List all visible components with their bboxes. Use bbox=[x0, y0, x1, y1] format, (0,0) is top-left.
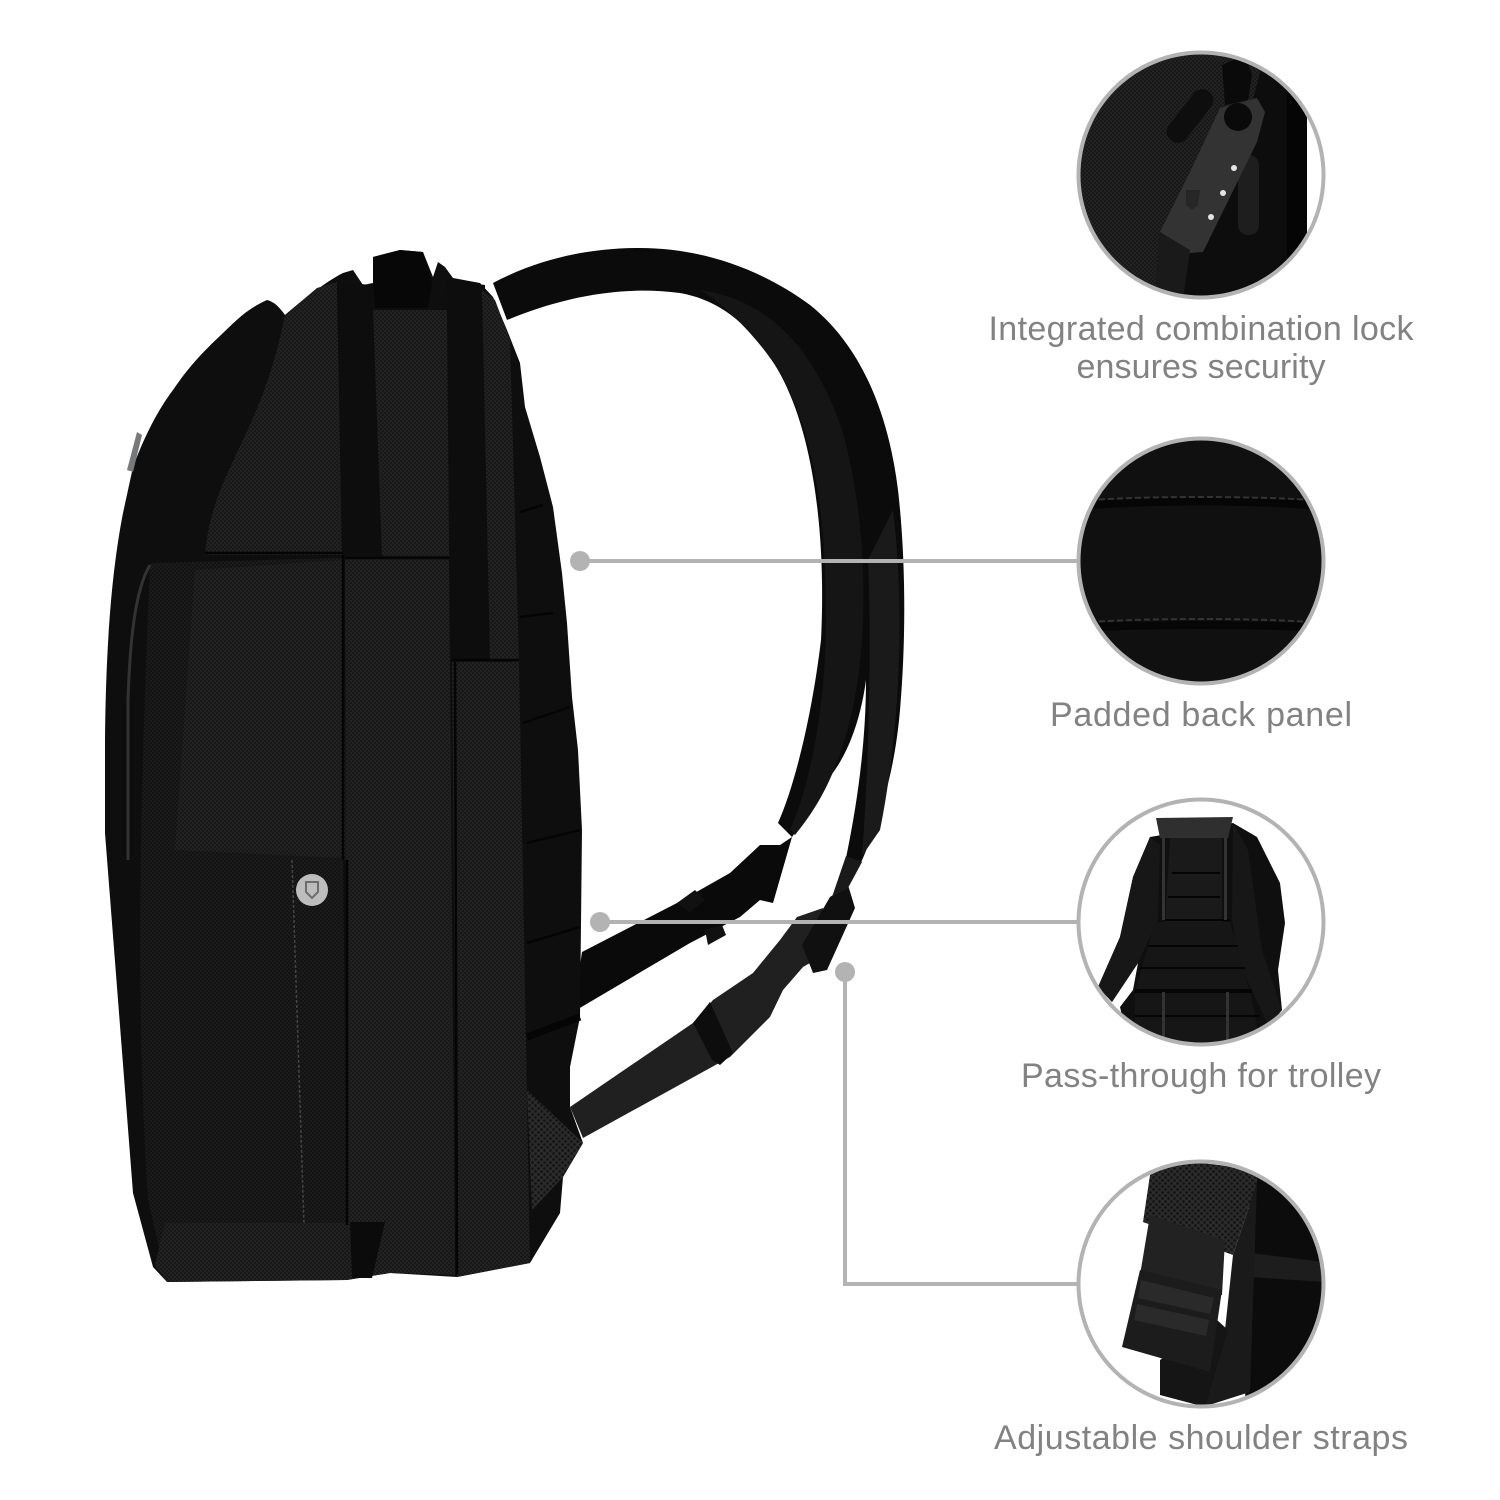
side tab bbox=[127, 432, 142, 472]
pocket edge stitching bbox=[292, 860, 304, 1225]
backpack side view bbox=[105, 248, 904, 1282]
buckle bbox=[1122, 1270, 1222, 1358]
logo stud bbox=[296, 874, 328, 906]
lower side sheen bbox=[175, 560, 345, 858]
caption: combination lock: ensures security bbox=[1076, 348, 1326, 386]
back seams bbox=[1135, 873, 1260, 1016]
right shoulder strap bbox=[1232, 823, 1282, 1025]
top handle bbox=[373, 250, 432, 308]
lower strap behind buckle bbox=[1160, 1320, 1228, 1407]
bottom band bbox=[155, 1223, 347, 1282]
lower back panel bbox=[1135, 922, 1262, 1050]
buckle strap link bbox=[832, 856, 862, 897]
body seams bbox=[205, 505, 580, 1275]
lock shield logo bbox=[1186, 190, 1200, 210]
zip pull right bbox=[1238, 155, 1259, 235]
right zip strip bbox=[447, 280, 490, 660]
caption: combination lock: Integrated combination lock bbox=[988, 310, 1414, 348]
right strap edge bbox=[1203, 1182, 1257, 1407]
caption: shoulder straps: Adjustable shoulder straps bbox=[994, 1419, 1408, 1457]
padded strap end bbox=[1143, 1160, 1257, 1255]
trolley rods bbox=[1162, 838, 1229, 1042]
caption: padded back panel: Padded back panel bbox=[1050, 696, 1352, 734]
back padding and body silhouette bbox=[105, 250, 583, 1282]
shoulder straps bbox=[493, 248, 904, 865]
left shoulder strap bbox=[1098, 837, 1150, 1002]
centre lower fabric panel bbox=[345, 558, 455, 1280]
webbing slider bbox=[693, 1002, 733, 1065]
detail circle: padded back panel bbox=[1078, 438, 1324, 684]
detail circle: trolley pass-through bbox=[1078, 799, 1324, 1050]
zipper top bbox=[1222, 55, 1252, 105]
lock body bbox=[1160, 98, 1265, 253]
caption: trolley pass-through: Pass-through for trolley bbox=[1021, 1057, 1381, 1095]
laptop zip curve bbox=[128, 565, 150, 860]
buckle webbing slots bbox=[1134, 1280, 1214, 1336]
lock shackle hole bbox=[1224, 103, 1252, 131]
backpack dark side bbox=[1245, 1177, 1322, 1396]
trolley handle bbox=[1156, 817, 1233, 838]
webbing bbox=[1140, 1215, 1225, 1295]
trolley opening panel bbox=[1165, 838, 1222, 922]
top zip strip bbox=[337, 282, 382, 555]
lower side fabric panel bbox=[140, 558, 347, 1282]
right lower fabric panel bbox=[452, 662, 530, 1277]
upper webbing strap bbox=[573, 837, 792, 1012]
stitched band bbox=[1254, 1254, 1322, 1282]
backpack rear body bbox=[1098, 823, 1285, 1050]
detail circle: combination lock bbox=[1078, 52, 1327, 300]
zip pull left bbox=[1166, 89, 1214, 143]
side pocket bbox=[163, 852, 347, 1223]
bottom zip bbox=[350, 1222, 385, 1278]
right top fabric panel bbox=[482, 290, 519, 662]
top centre fabric panel bbox=[373, 310, 449, 556]
callout line: padded back panel bbox=[570, 551, 1080, 571]
lock dials bbox=[1208, 165, 1237, 220]
lower webbing strap bbox=[570, 908, 823, 1138]
upper webbing tabs bbox=[677, 890, 726, 945]
webbing under lock bbox=[1156, 232, 1190, 294]
detail circle: shoulder straps bbox=[1078, 1160, 1324, 1407]
callout line: trolley pass-through bbox=[590, 912, 1080, 932]
callout line: shoulder straps bbox=[835, 962, 1080, 1284]
top front fabric panel bbox=[205, 282, 342, 555]
mesh bottle wedge bbox=[527, 1090, 583, 1210]
strap buckle bbox=[802, 885, 855, 973]
